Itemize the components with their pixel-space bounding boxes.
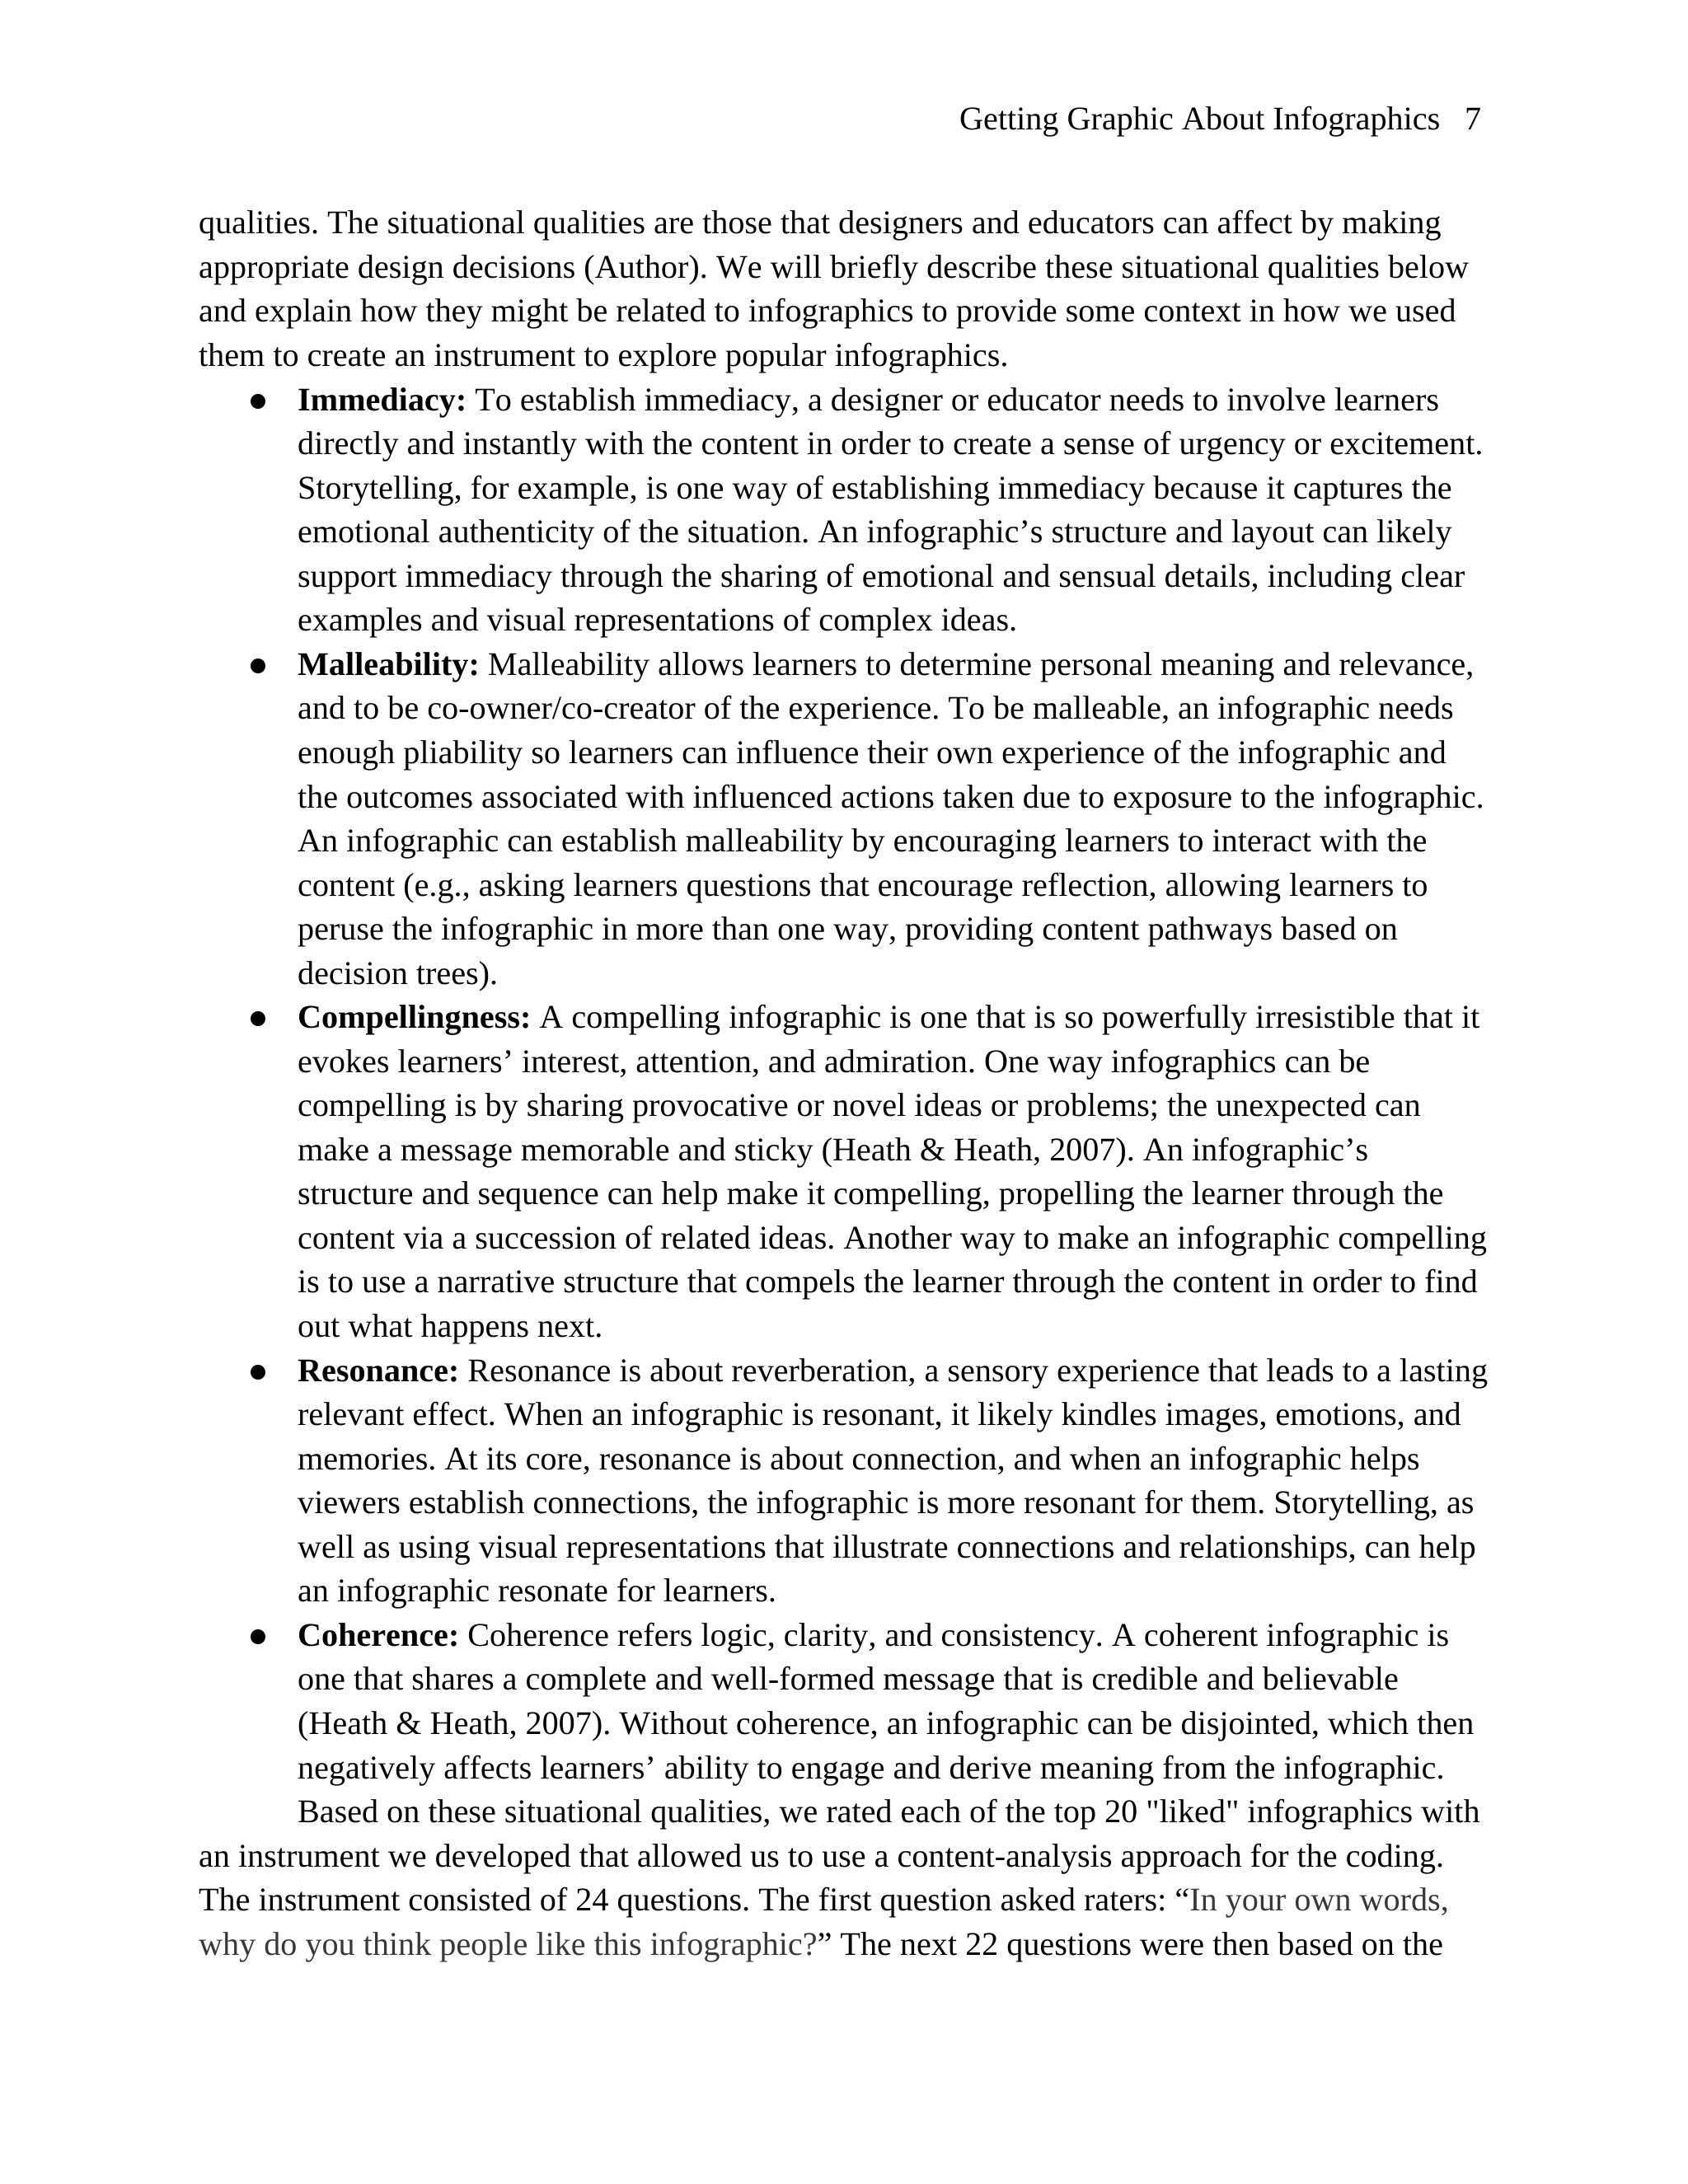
bullet: Malleability: peruse the infographic in more than one way, providing content pathways based on [298,910,1398,947]
bullet: Immediacy: emotional authenticity of the situation. An infographic’s structure and layout can likely [298,513,1452,550]
bullet: Immediacy: Storytelling, for example, is one way of establishing immediacy because it captures the [298,469,1452,506]
bullet: Immediacy: directly and instantly with the content in order to create a sense of urgency or excitement. [298,424,1483,462]
running header: Getting Graphic About Infographics [959,100,1440,137]
bullet: Compellingness: Compellingness: A compelling infographic is one that is so powerfully irresistible that it [298,998,1479,1035]
closing paragraph: The instrument consisted of 24 questions. The first question asked raters: “In your own words, [199,1881,1449,1918]
bullet: Malleability [251,645,1484,991]
bullet: Resonance: an infographic resonate for learners. [298,1572,776,1609]
bullet: Coherence: one that shares a complete and well-formed message that is credible and believable [298,1660,1399,1697]
bullet: Compellingness: is to use a narrative structure that compels the learner through the content in order to find [298,1263,1478,1300]
closing paragraph [199,1793,1480,1962]
bullet: Compellingness: structure and sequence can help make it compelling, propelling the learner through the [298,1174,1443,1212]
bullet: Compellingness: evokes learners’ interest, attention, and admiration. One way infographics can be [298,1043,1370,1080]
bullet: Immediacy [251,381,1483,638]
bullet: Malleability: the outcomes associated with influenced actions taken due to exposure to the infographic. [298,778,1484,815]
bullet: Malleability: enough pliability so learners can influence their own experience of the infographic and [298,733,1447,771]
bullet: Immediacy: Immediacy: To establish immediacy, a designer or educator needs to involve learners [298,381,1439,417]
bullet: Coherence: (Heath & Heath, 2007). Without coherence, an infographic can be disjointed, which then [298,1704,1474,1741]
bullet: Coherence [251,1616,1474,1786]
intro paragraph: qualities. The situational qualities are those that designers and educators can affect by making [199,204,1442,241]
intro paragraph: and explain how they might be related to infographics to provide some context in how we used [199,292,1456,329]
intro paragraph: them to create an instrument to explore popular infographics. [199,336,1008,373]
intro paragraph [199,204,1469,373]
intro paragraph: appropriate design decisions (Author). We will briefly describe these situational qualities below [199,248,1469,285]
bullet: Malleability: decision trees). [298,954,498,991]
bullet: Malleability: An infographic can establish malleability by encouraging learners to interact with the [298,822,1427,859]
bullet: Coherence: Coherence: Coherence refers logic, clarity, and consistency. A coherent infographic is [298,1616,1449,1653]
bullet: Compellingness: out what happens next. [298,1307,603,1344]
bullet: Compellingness [251,998,1487,1344]
bullet: Resonance: relevant effect. When an infographic is resonant, it likely kindles images, emotions, and [298,1395,1461,1432]
bullet: Compellingness: make a message memorable and sticky (Heath & Heath, 2007). An infographic’s [298,1131,1368,1168]
bullet: Immediacy: support immediacy through the sharing of emotional and sensual details, including clear [298,557,1465,594]
running header: 7 [1465,100,1481,137]
bullet: Malleability: and to be co-owner/co-creator of the experience. To be malleable, an infographic needs [298,689,1454,726]
bullet: Malleability: content (e.g., asking learners questions that encourage reflection, allowing learners to [298,866,1428,903]
bullet: Resonance [251,1352,1488,1609]
closing paragraph: Based on these situational qualities, we rated each of the top 20 "liked" infographics with [298,1793,1480,1830]
bullet: Resonance: memories. At its core, resonance is about connection, and when an infographic helps [298,1440,1420,1477]
bullet: Resonance: viewers establish connections, the infographic is more resonant for them. Storytelling, as [298,1483,1474,1521]
bullet: Compellingness: content via a succession of related ideas. Another way to make an infographic compelling [298,1219,1487,1256]
bullet: Coherence: negatively affects learners’ ability to engage and derive meaning from the infographic. [298,1749,1445,1786]
bullet: Malleability: Malleability: Malleability allows learners to determine personal meaning and relevance, [298,645,1474,682]
closing paragraph: why do you think people like this infographic?” The next 22 questions were then based on the [199,1925,1443,1962]
bullet: Immediacy: examples and visual representations of complex ideas. [298,601,1017,638]
closing paragraph: an instrument we developed that allowed us to use a content-analysis approach for the coding. [199,1837,1444,1874]
bullet: Compellingness: compelling is by sharing provocative or novel ideas or problems; the unexpected can [298,1086,1421,1123]
bullet: Resonance: Resonance: Resonance is about reverberation, a sensory experience that leads to a lasting [298,1352,1488,1389]
bullet: Resonance: well as using visual representations that illustrate connections and relationships, can help [298,1528,1476,1565]
